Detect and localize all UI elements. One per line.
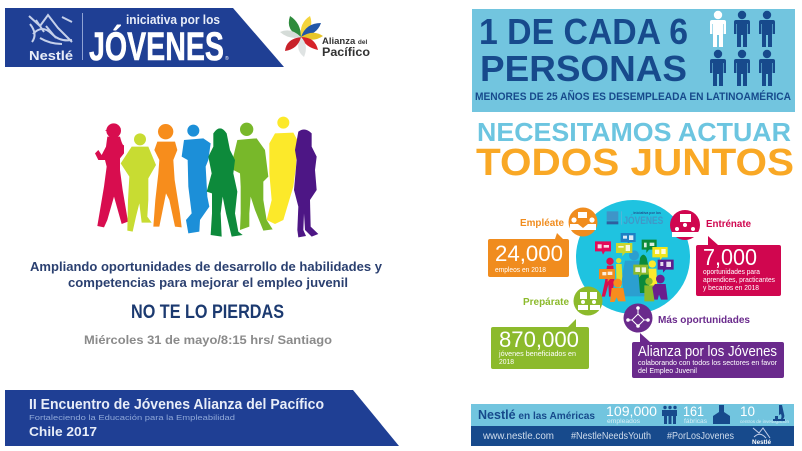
callout: y becarios en 2018 bbox=[703, 283, 759, 292]
icon: employees bbox=[662, 406, 677, 424]
name: Alianza del bbox=[322, 36, 367, 47]
icon: training bbox=[670, 210, 700, 240]
subtitle: competencias para mejorar el empleo juvenil bbox=[68, 275, 348, 290]
block: Empléate bbox=[488, 208, 598, 277]
callout: colaborando con todos los sectores en favor bbox=[638, 360, 778, 367]
icon: pinwheel bbox=[280, 16, 323, 57]
heading: todos juntos: TODOS JUNTOS bbox=[476, 142, 794, 184]
stat: factories: 161 bbox=[683, 404, 704, 419]
footer banner bbox=[5, 390, 399, 446]
icon: Nestlé nest logo bbox=[29, 15, 72, 44]
callout: 870,000 bbox=[499, 327, 579, 352]
callout: jóvenes beneficiados en bbox=[498, 351, 576, 358]
young people silhouettes bbox=[602, 250, 668, 302]
label: Prepárate bbox=[523, 296, 569, 308]
illustration: colourful silhouettes of young people bbox=[95, 117, 318, 237]
block: Entrénate bbox=[670, 210, 781, 296]
callout: 2018 bbox=[499, 359, 514, 366]
footer banner: Fortaleciendo la Educación para la Empleabilidad bbox=[29, 415, 235, 422]
icon: six people, one highlighted bbox=[710, 11, 775, 86]
icon: preparation bbox=[574, 286, 602, 316]
speech bubbles bbox=[595, 233, 674, 282]
central circle illustration bbox=[576, 200, 690, 314]
icon: Nestlé logo: Nestlé bbox=[752, 440, 772, 446]
Nestlé wordmark: Nestlé bbox=[29, 48, 73, 63]
stat: factories bbox=[683, 404, 707, 425]
header banner bbox=[5, 8, 284, 69]
footer banner: II Encuentro de Jóvenes Alianza del Pacífico bbox=[29, 396, 324, 413]
call to action: NO TE LO PIERDAS bbox=[131, 301, 284, 323]
label: Empléate bbox=[520, 217, 564, 229]
logo: Alianza del Pacífico bbox=[280, 16, 370, 59]
icon: microscope bbox=[773, 405, 785, 421]
label: Entrénate bbox=[706, 218, 751, 230]
stat: research centres bbox=[740, 404, 790, 424]
callout: 24,000 bbox=[495, 241, 563, 266]
icon: people meeting bbox=[568, 208, 598, 236]
date and place: Miércoles 31 de mayo/8:15 hrs/ Santiago bbox=[84, 333, 332, 347]
stat: employees: 109,000 bbox=[606, 404, 657, 419]
contact bar: #NestleNeedsYouth bbox=[571, 431, 651, 442]
callout bbox=[696, 236, 781, 296]
stat: research centres: centros de investigación bbox=[740, 419, 790, 424]
stat: research centres: 10 bbox=[740, 404, 755, 419]
initiative label: iniciativa por los bbox=[126, 13, 220, 27]
panel: unemployment statistic bbox=[472, 9, 795, 112]
icon: factory bbox=[713, 405, 730, 424]
callout: empleos en 2018 bbox=[495, 267, 546, 274]
headline: 1 DE CADA 6 bbox=[479, 11, 688, 52]
contact bar: www.nestle.com bbox=[482, 431, 554, 442]
block: Más oportunidades bbox=[624, 304, 784, 378]
stat: employees: empleados bbox=[607, 419, 640, 425]
footer banner: Chile 2017 bbox=[29, 424, 97, 439]
callout bbox=[491, 319, 589, 369]
callout: aprendices, practicantes bbox=[703, 275, 775, 284]
icon: Nestlé logo bbox=[752, 428, 772, 446]
callout bbox=[632, 333, 784, 378]
logo: Alianza del Pacífico: Pacífico bbox=[322, 47, 370, 59]
heading: Nestlé en las Américas bbox=[478, 407, 595, 422]
stat: employees bbox=[606, 404, 657, 425]
callout: oportunidades para bbox=[703, 267, 760, 276]
callout: 7,000 bbox=[703, 244, 757, 270]
label: Más oportunidades bbox=[658, 314, 750, 326]
mini logo: iniciativa por los bbox=[633, 211, 661, 215]
callout bbox=[488, 233, 569, 277]
mini logo: JÓVENES bbox=[623, 214, 663, 227]
subtitle: Ampliando oportunidades de desarrollo de habilidades y bbox=[30, 259, 383, 274]
callout: del Empleo Juvenil bbox=[638, 368, 697, 375]
stat: factories: fábricas bbox=[684, 419, 707, 425]
mini logo bbox=[607, 211, 663, 227]
block: Prepárate bbox=[491, 286, 602, 369]
callout: Alianza por los Jóvenes bbox=[638, 343, 777, 360]
contact bar: #PorLosJovenes bbox=[667, 431, 734, 442]
panel: Nestlé in the Americas bbox=[471, 404, 794, 446]
icon: network bbox=[624, 304, 652, 332]
panel: unemployment statistic: PERSONAS bbox=[480, 48, 687, 89]
JÓVENES wordmark: JÓVENES bbox=[89, 23, 224, 69]
subtitle bbox=[30, 259, 383, 290]
contact bar bbox=[471, 426, 794, 446]
registered mark: ® bbox=[225, 55, 229, 62]
heading: necesitamos actuar: NECESITAMOS ACTUAR bbox=[477, 117, 791, 147]
panel: event invitation bbox=[5, 8, 399, 446]
